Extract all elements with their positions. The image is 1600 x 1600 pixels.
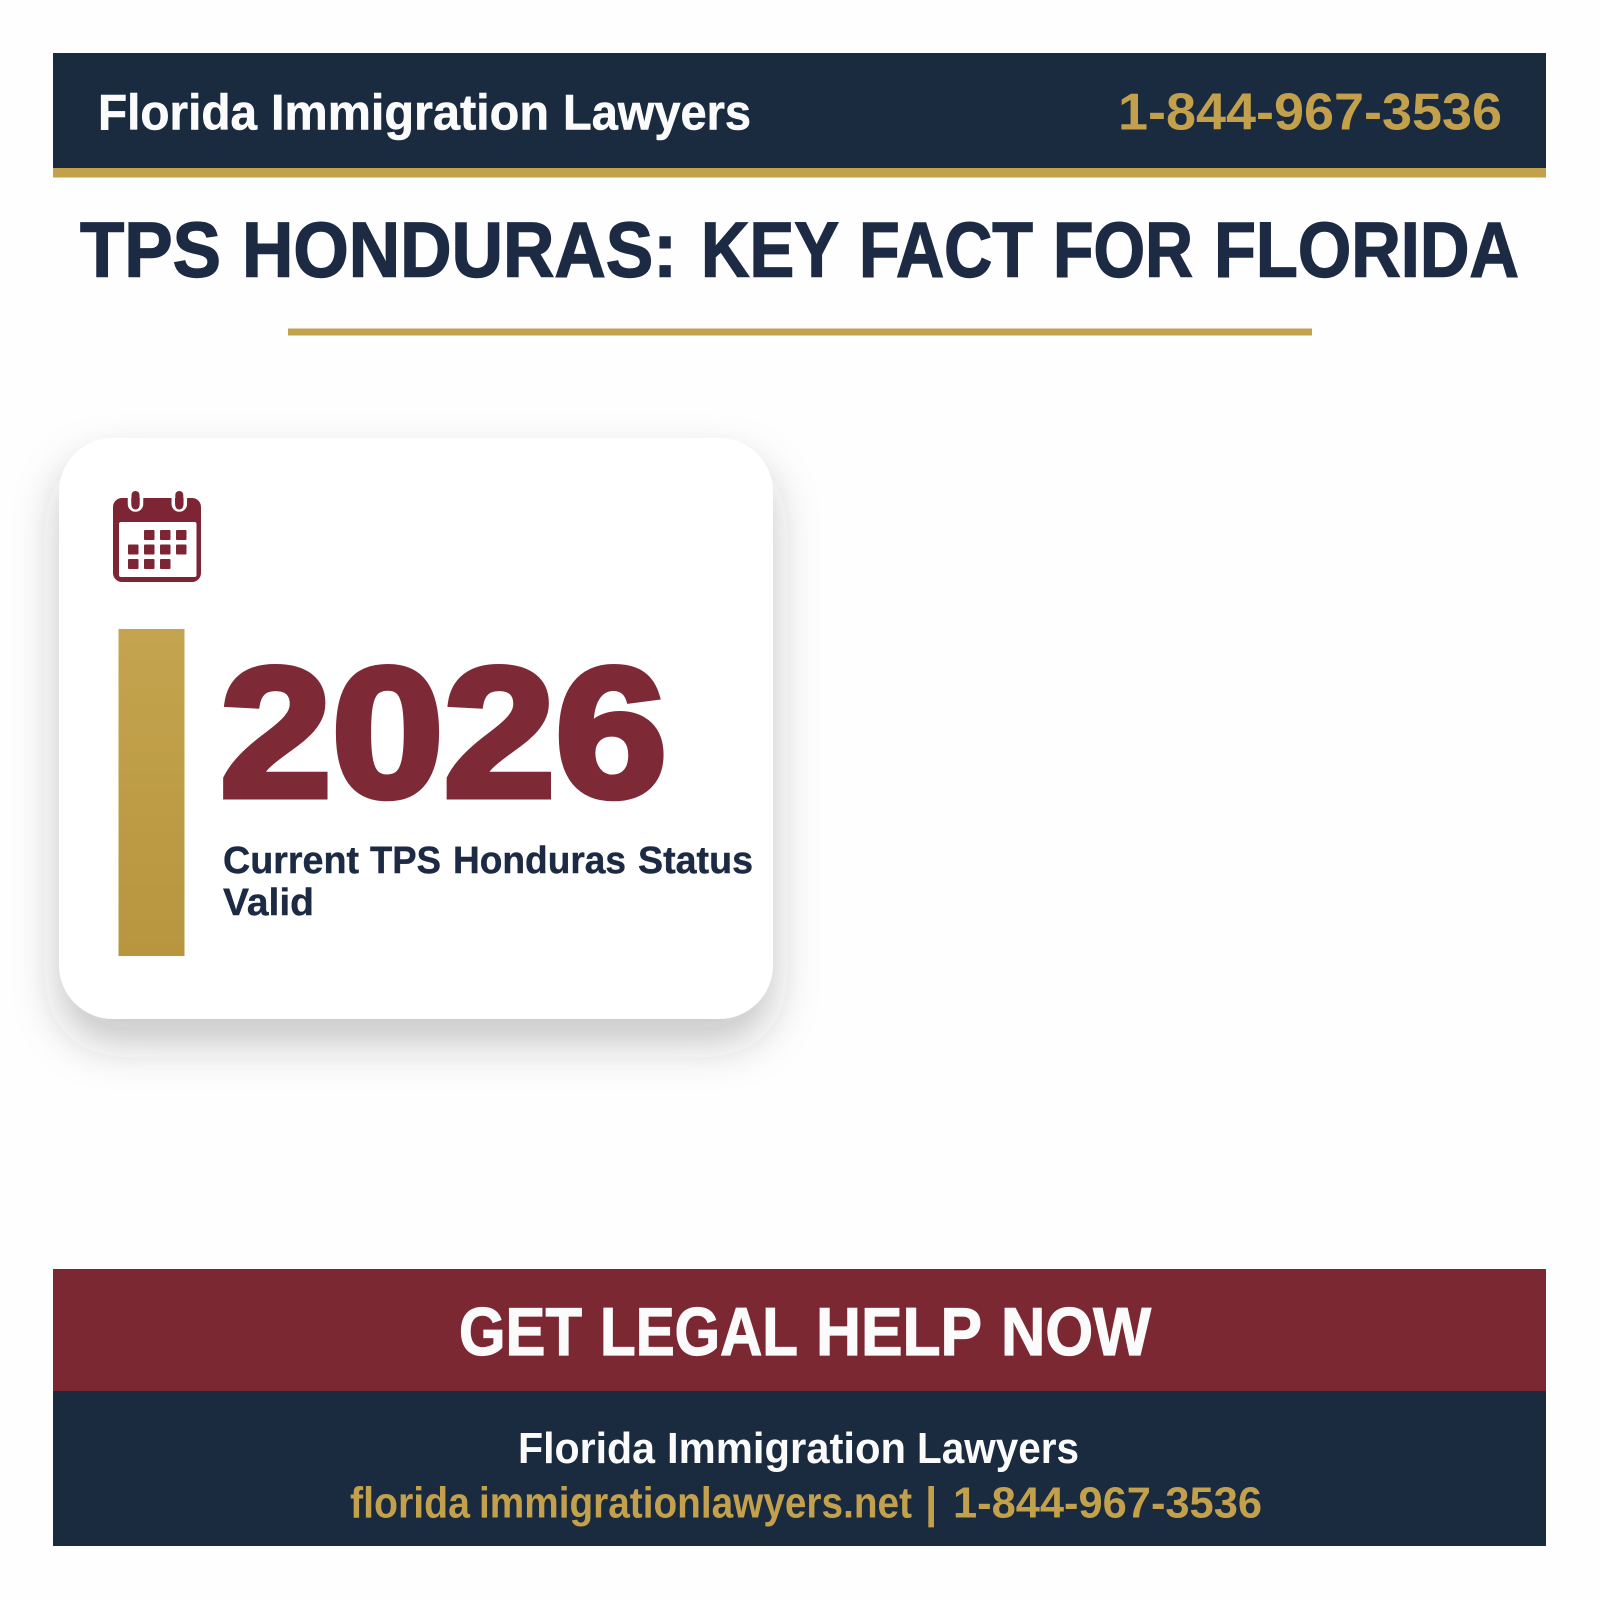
- title: FLORIDA: [1214, 206, 1519, 294]
- header phone number: 1-844-967-3536: [1118, 84, 1502, 142]
- footer website and phone: immigrationlawyers.net: [479, 1478, 912, 1528]
- call to action band: [53, 1269, 1546, 1391]
- call to action text: LEGAL: [600, 1294, 798, 1370]
- big number 2026: 2026: [220, 629, 667, 835]
- footer website and phone: florida: [350, 1478, 470, 1528]
- footer firm name: Florida: [518, 1424, 655, 1473]
- footer firm name: Immigration: [667, 1424, 906, 1473]
- header background: [53, 53, 1546, 168]
- header firm name: Florida: [98, 84, 258, 140]
- header banner: [53, 53, 1546, 178]
- footer firm name: Lawyers: [917, 1424, 1079, 1473]
- title: FACT: [859, 206, 1033, 294]
- status description: Honduras: [453, 840, 626, 882]
- title: KEY: [701, 206, 839, 294]
- contact band: [53, 1391, 1546, 1546]
- title underline: [288, 328, 1312, 336]
- card background: [59, 438, 773, 1019]
- call to action text: GET: [459, 1294, 582, 1370]
- status description: Status: [638, 840, 753, 882]
- status description: Current: [223, 840, 359, 882]
- panel: key fact card: [59, 438, 773, 1019]
- header firm name: Immigration: [271, 84, 549, 140]
- title: FOR: [1053, 206, 1193, 294]
- status description: [223, 840, 753, 924]
- title: HONDURAS:: [242, 206, 677, 294]
- footer website and phone: |: [925, 1478, 937, 1528]
- icon: calendar: [113, 491, 201, 582]
- call to action text: NOW: [1001, 1294, 1152, 1370]
- footer call to action: [53, 1269, 1546, 1546]
- call to action text: HELP: [816, 1294, 982, 1370]
- status description: TPS: [370, 840, 441, 882]
- title: TPS: [80, 206, 221, 294]
- header firm name: Lawyers: [563, 84, 751, 140]
- gold accent bar: [118, 629, 184, 956]
- status description: Valid: [223, 882, 314, 924]
- header gold stripe: [53, 168, 1546, 178]
- footer website and phone: 1-844-967-3536: [953, 1478, 1262, 1528]
